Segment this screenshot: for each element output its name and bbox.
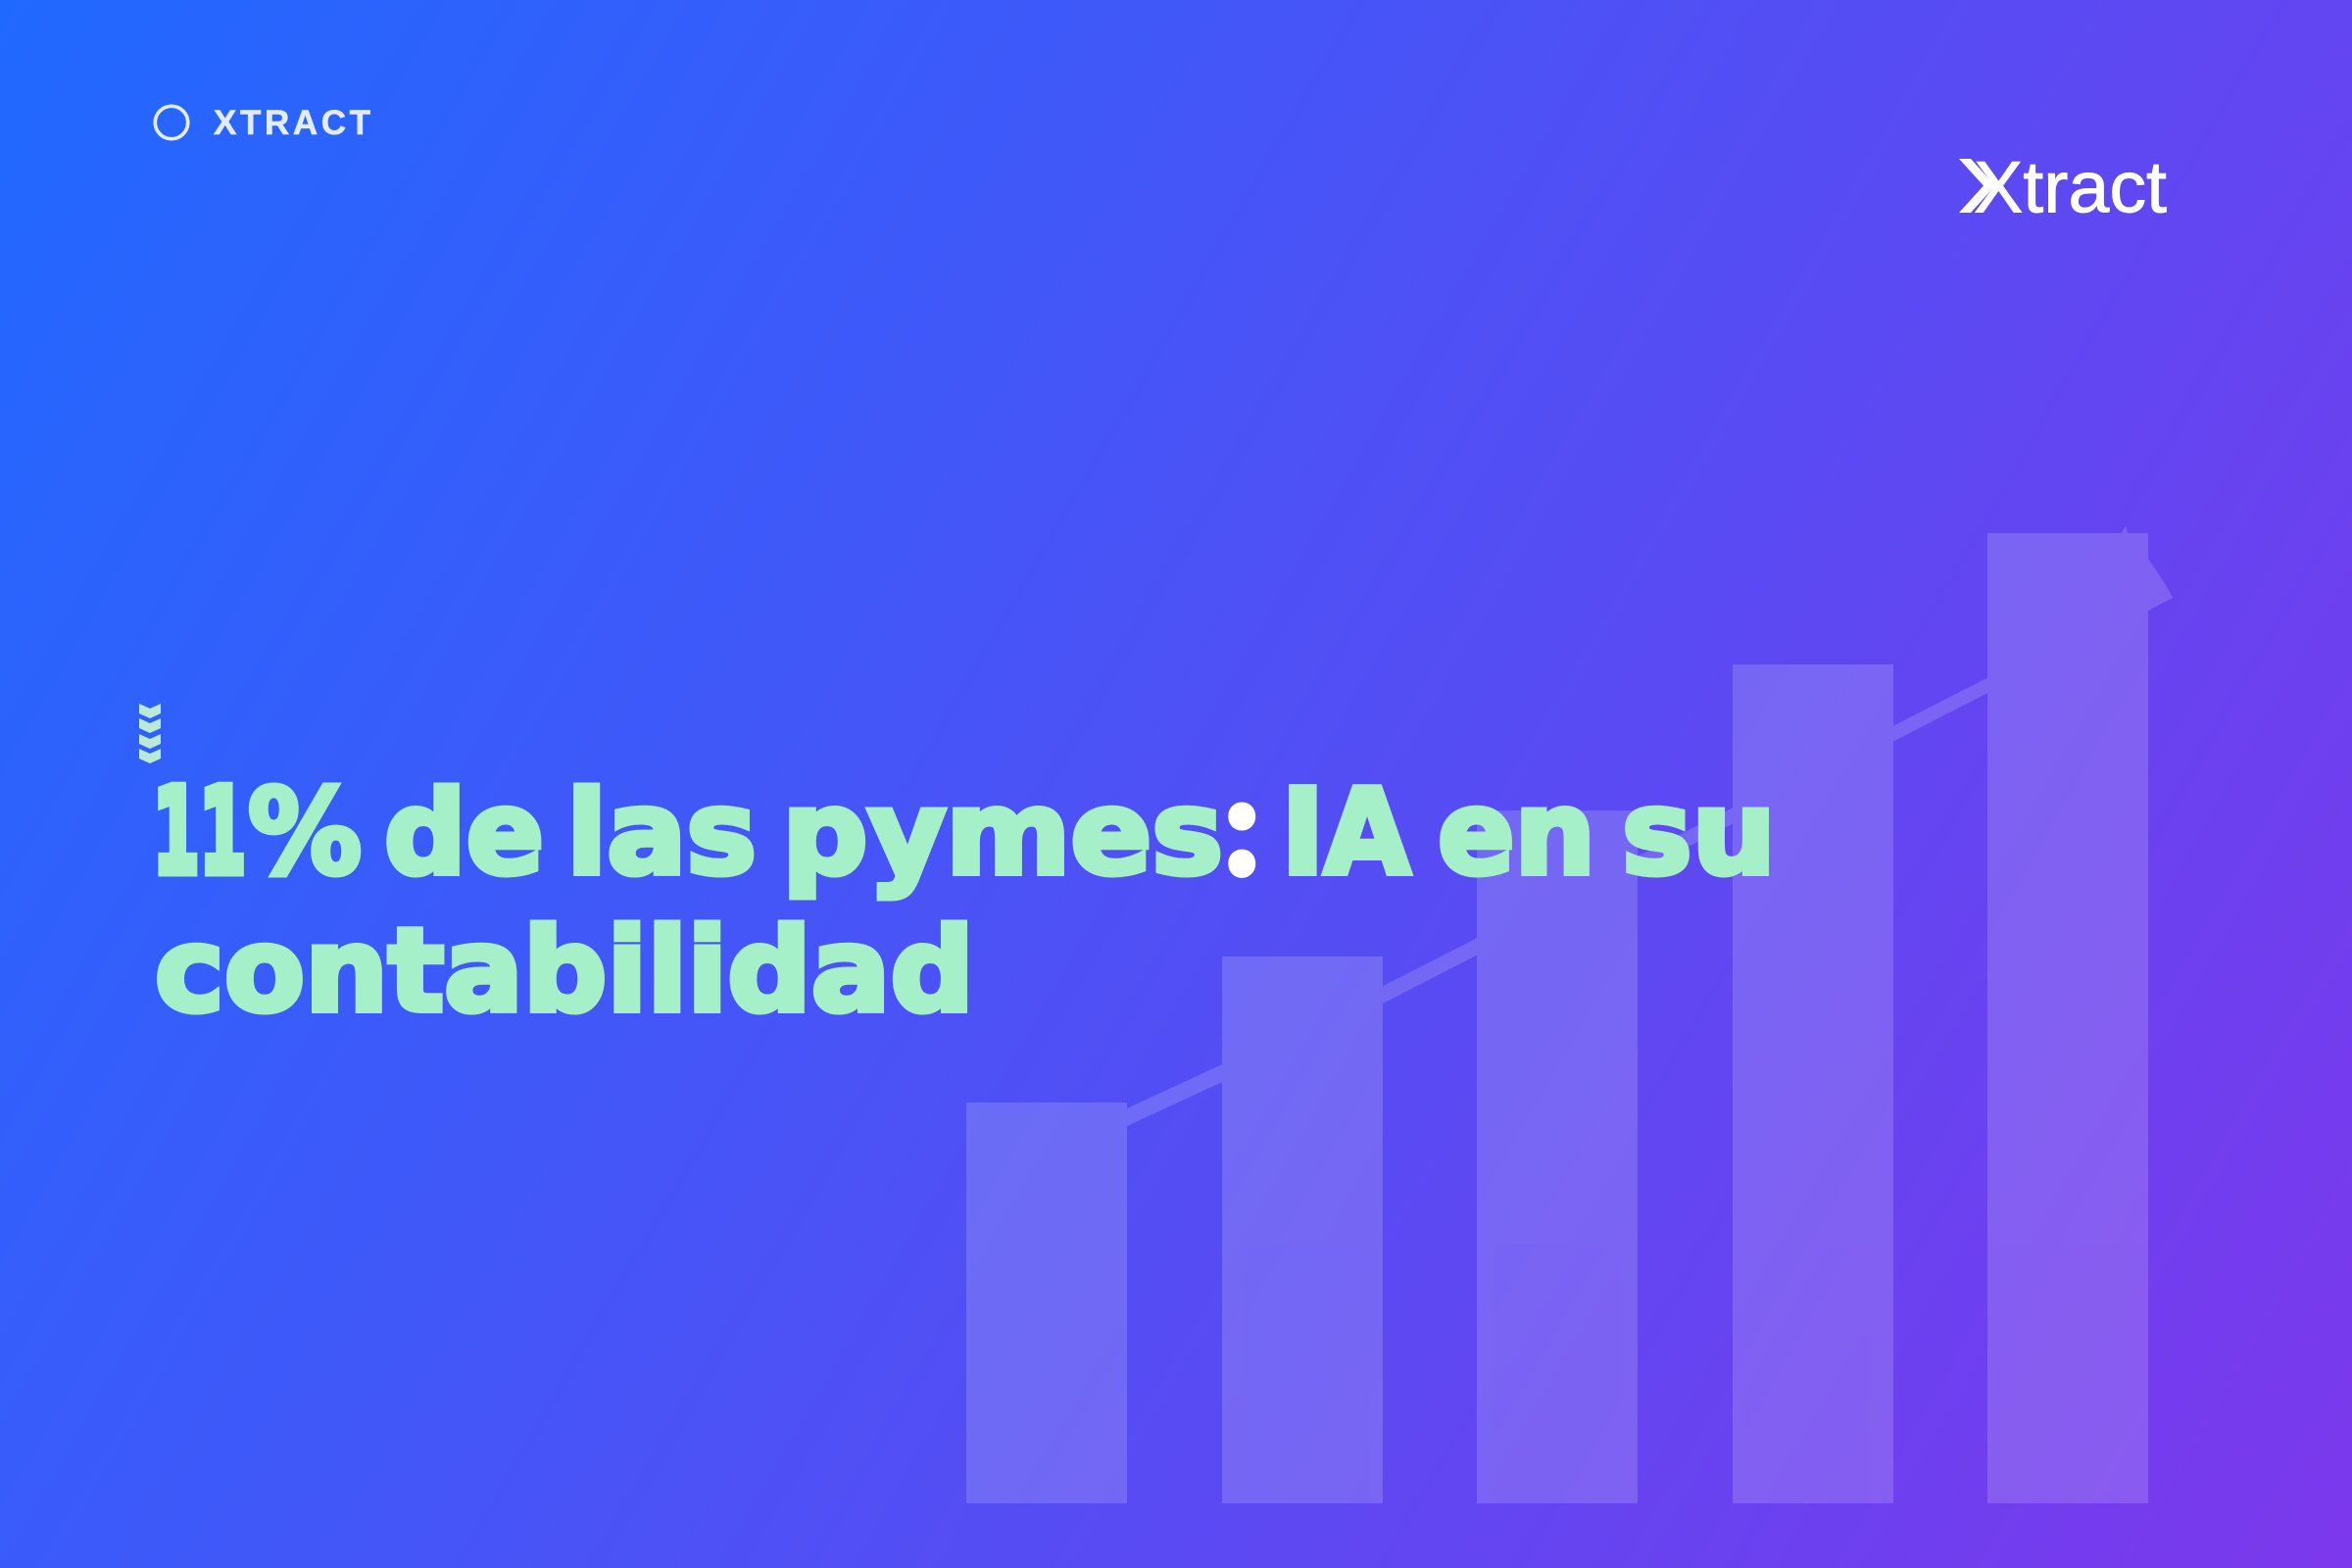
title: contabilidad xyxy=(155,903,974,1038)
title: las xyxy=(566,765,757,901)
title xyxy=(153,727,1776,1038)
title: en xyxy=(1438,765,1595,901)
icon: stacked chevrons xyxy=(139,704,161,763)
bar chart with rising trend line xyxy=(966,526,2173,1503)
title: pymes xyxy=(782,765,1223,901)
title: % xyxy=(248,765,362,902)
title: : xyxy=(1219,727,1264,914)
title: su xyxy=(1622,765,1776,901)
brand label: circle and XTRACT: XTRACT xyxy=(214,104,370,142)
title: de xyxy=(384,765,544,901)
title: A xyxy=(1324,765,1410,902)
logo: Xtract wordmark: Xtract xyxy=(1974,147,2167,227)
title: 11 xyxy=(153,764,246,901)
title: I xyxy=(1281,765,1325,902)
